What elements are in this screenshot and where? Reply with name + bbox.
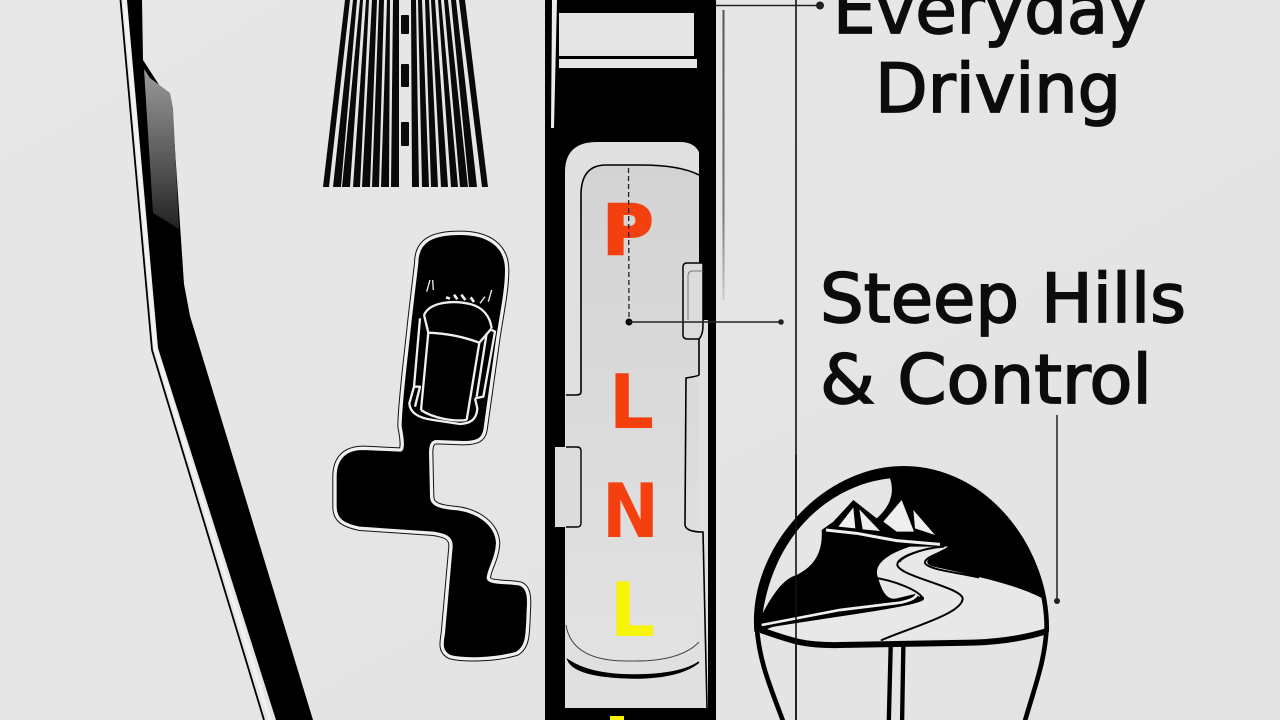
shaft — [889, 647, 903, 720]
heading: Steep Hills & Control: Steep Hills — [820, 260, 1186, 339]
right side vertical rules — [722, 0, 796, 720]
leader line: gear dashed connector — [626, 168, 784, 326]
ground and road surface — [760, 547, 1045, 645]
white road strips — [762, 595, 917, 625]
right tab — [683, 263, 703, 339]
heading: Everyday Driving: Driving — [875, 50, 1121, 129]
knob dome — [756, 468, 1047, 632]
inner gear plate — [566, 165, 699, 662]
leader line: everyday driving — [716, 2, 824, 10]
knob rim — [761, 630, 1045, 645]
left curved road edge — [120, 0, 313, 720]
gear shifter housing — [545, 0, 716, 720]
icon: car on winding track — [335, 233, 529, 659]
gear letter N: N — [602, 467, 659, 555]
car outline — [409, 280, 495, 424]
gear panel — [565, 142, 708, 708]
road edges — [763, 546, 978, 640]
lower thick curve — [568, 660, 699, 678]
vertical rule over knob — [795, 455, 797, 720]
leader line: steep hills — [1054, 415, 1060, 604]
heading: Steep Hills & Control: & Control — [820, 341, 1152, 420]
partial yellow letter at bottom — [610, 716, 624, 720]
gear letter P: P — [603, 192, 653, 270]
sky — [763, 478, 892, 613]
top window strip — [559, 59, 697, 68]
heading: Steep Hills & Control — [820, 260, 1186, 420]
gear letter L yellow: L — [610, 566, 655, 654]
icon: highway road — [323, 0, 488, 187]
knob outline — [756, 468, 1047, 720]
icon: mountain road in gear knob — [756, 468, 1047, 720]
plate outlines — [566, 165, 707, 708]
gear letter L: L — [609, 358, 654, 446]
mountain highlights — [838, 500, 935, 535]
bottom bar — [547, 708, 707, 720]
heading: Everyday Driving — [833, 0, 1148, 129]
left tab — [555, 447, 581, 527]
top window panel — [559, 13, 694, 56]
